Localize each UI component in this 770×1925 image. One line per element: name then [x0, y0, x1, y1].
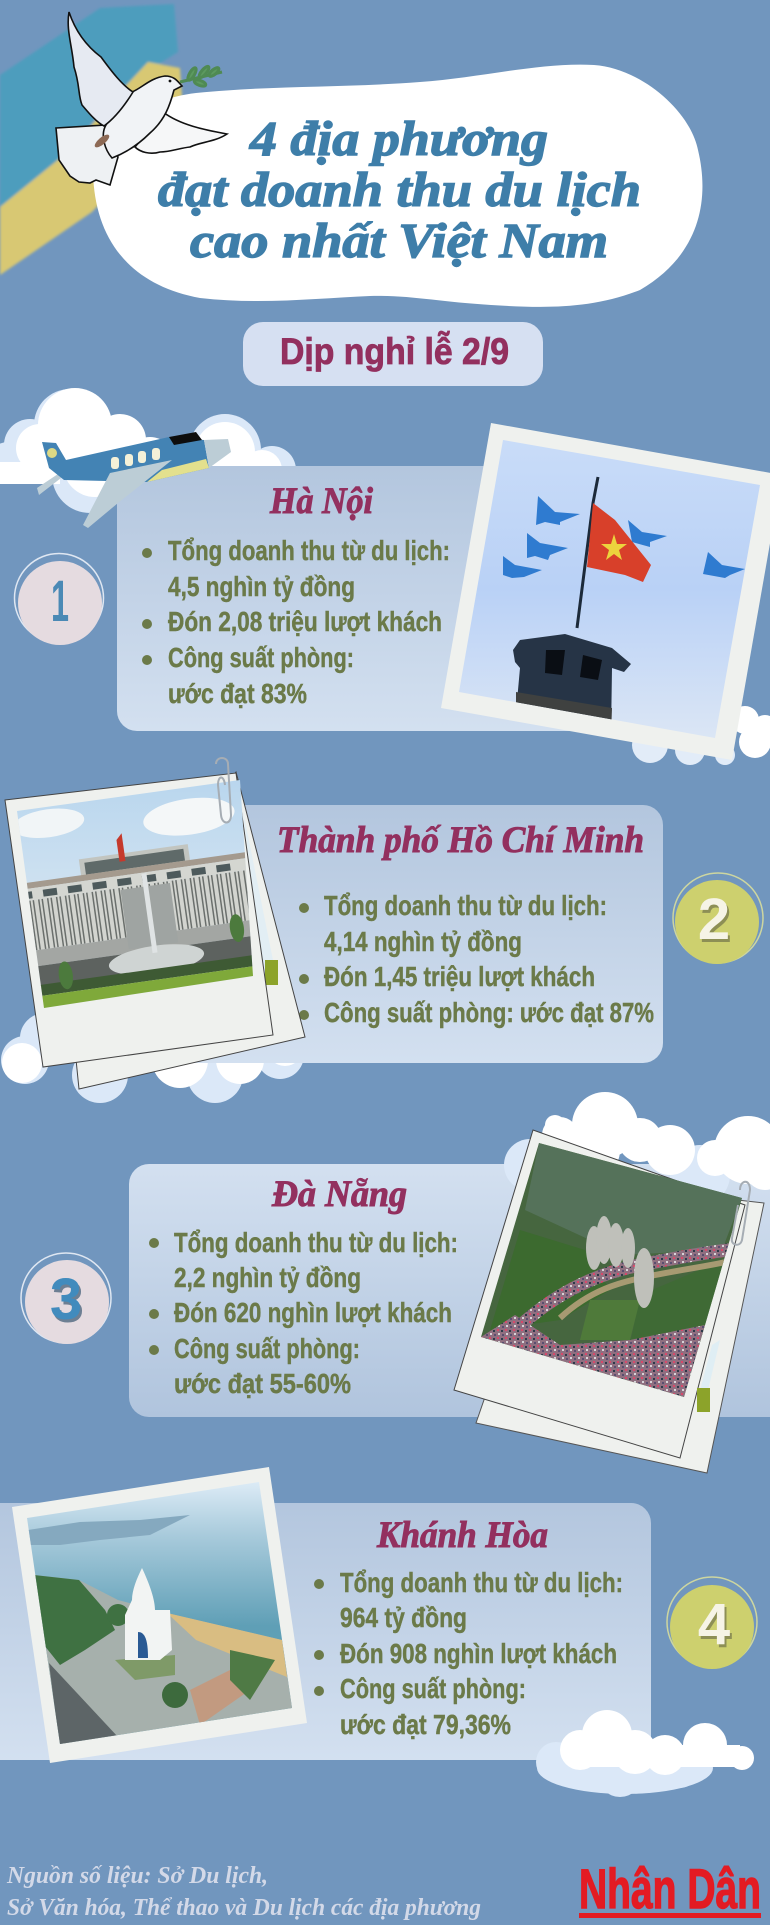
cloud lower right — [536, 1710, 754, 1797]
source note: Sở Văn hóa, Thể thao và Du lịch các địa phương — [7, 1895, 481, 1921]
right wing — [135, 112, 227, 153]
number badge 2 — [673, 873, 763, 964]
bullet list — [314, 1567, 623, 1740]
bullet list — [149, 1227, 458, 1399]
paperclip — [216, 758, 231, 822]
cloud under photo 1 — [632, 706, 770, 765]
source note: Nguồn số liệu: Sở Du lịch, — [6, 1863, 268, 1889]
photo 1: flag over Hanoi flag tower — [441, 423, 770, 760]
bullet list: ước đạt 79,36% — [340, 1709, 511, 1740]
heading: Hà Nội — [269, 481, 374, 522]
bullet list: Công suất phòng: — [340, 1673, 526, 1704]
bullet list: Công suất phòng: — [174, 1333, 360, 1364]
bullet list: Tổng doanh thu từ du lịch: — [340, 1567, 623, 1598]
title blob — [93, 65, 702, 307]
airplane icon — [37, 432, 231, 528]
heading: Thành phố Hồ Chí Minh — [277, 820, 644, 861]
paperclip — [732, 1182, 750, 1245]
pole — [577, 477, 598, 628]
number badge 3: 3 — [52, 1270, 84, 1335]
bullet list: 4,14 nghìn tỷ đồng — [324, 926, 522, 957]
title: đạt doanh thu du lịch — [158, 162, 641, 217]
panel 4: Khánh Hòa — [0, 1503, 651, 1760]
number badge 2: 2 — [698, 887, 730, 952]
photo 2: Independence Palace — [0, 758, 305, 1089]
bullet list: Công suất phòng: — [168, 642, 354, 673]
source note — [6, 1863, 481, 1921]
cloud behind photo 2 — [1, 1013, 304, 1103]
tower — [513, 634, 631, 720]
bullet list: Tổng doanh thu từ du lịch: — [324, 890, 607, 921]
bullet list: Đón 620 nghìn lượt khách — [174, 1297, 452, 1328]
number badge 3: 3 — [50, 1267, 82, 1332]
front sheet — [5, 773, 273, 1067]
cloud behind airplane — [0, 388, 296, 513]
bullet list: Đón 908 nghìn lượt khách — [340, 1638, 617, 1669]
cloud behind photo 3 — [504, 1092, 770, 1205]
number badge 4: 4 — [698, 1592, 730, 1657]
number badge 4 — [667, 1577, 757, 1669]
bullet list: Tổng doanh thu từ du lịch: — [168, 535, 450, 566]
number badge 1 — [14, 554, 104, 645]
bullet list: ước đạt 55-60% — [174, 1368, 351, 1399]
bullet list: ước đạt 83% — [168, 678, 307, 709]
subtitle pill: Dịp nghỉ lễ 2/9 — [280, 331, 509, 372]
bullet list — [142, 535, 450, 709]
bullet list: Công suất phòng: ước đạt 87% — [324, 997, 654, 1028]
panel 3: Đà Nẵng — [129, 1164, 770, 1417]
bullet list: 964 tỷ đồng — [340, 1602, 467, 1633]
bullet list: Đón 2,08 triệu lượt khách — [168, 606, 442, 637]
upper wing — [68, 12, 133, 126]
title: cao nhất Việt Nam — [190, 213, 608, 268]
title: 4 địa phương — [249, 111, 548, 166]
body and head — [103, 76, 182, 158]
subtitle pill — [243, 322, 543, 386]
panel 1: Hà Nội — [117, 466, 627, 731]
bullet list: 2,2 nghìn tỷ đồng — [174, 1262, 361, 1293]
olive branch — [180, 65, 222, 87]
number badge 3 — [21, 1253, 111, 1344]
bullet list — [299, 890, 654, 1028]
title — [158, 111, 641, 268]
back sheet — [70, 772, 305, 1089]
bullet list: Đón 1,45 triệu lượt khách — [324, 961, 595, 992]
front sheet — [454, 1130, 745, 1458]
dove icon — [56, 12, 227, 185]
bullet list: Tổng doanh thu từ du lịch: — [174, 1227, 458, 1258]
brush strokes: blue and yellow — [0, 4, 182, 275]
number badge 1: 1 — [51, 569, 69, 634]
back sheet — [476, 1180, 764, 1473]
panel 2: Thành phố Hồ Chí Minh — [150, 805, 663, 1063]
bullet list: 4,5 nghìn tỷ đồng — [168, 571, 355, 602]
jets — [503, 496, 745, 578]
number badge 2: 2 — [700, 890, 732, 955]
photo 4: Tram Huong tower — [12, 1467, 307, 1763]
photo 3: Golden Bridge — [454, 1130, 764, 1473]
tail — [56, 125, 118, 185]
heading: Khánh Hòa — [376, 1515, 548, 1556]
heading: Đà Nẵng — [271, 1174, 407, 1215]
number badge 4: 4 — [700, 1595, 732, 1660]
flag — [587, 503, 651, 582]
